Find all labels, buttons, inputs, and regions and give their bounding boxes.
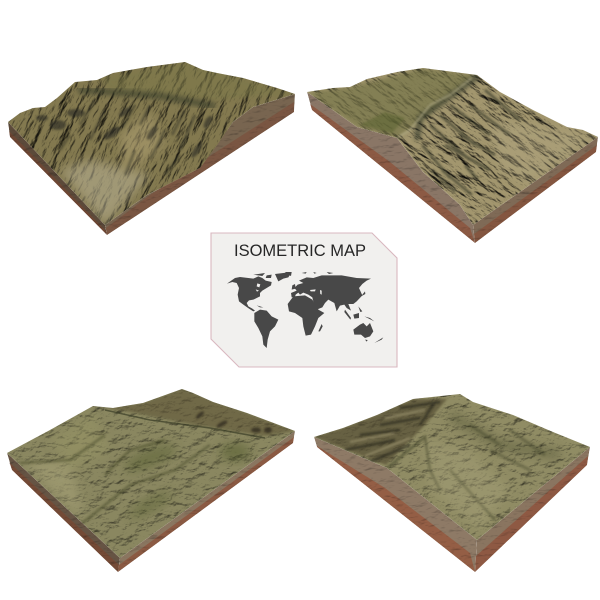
north america	[227, 276, 272, 311]
side faces	[314, 437, 590, 572]
card background	[211, 233, 397, 367]
side faces	[8, 94, 295, 235]
terrain surface	[314, 394, 590, 540]
americas	[227, 272, 292, 348]
terrain block: top right	[307, 68, 598, 243]
caribbean	[257, 305, 263, 307]
inland seas	[310, 289, 322, 295]
side faces	[307, 92, 598, 243]
terrain block: top left	[8, 62, 295, 235]
greenland and arctic islands	[253, 272, 292, 281]
africa	[288, 295, 324, 336]
title: ISOMETRIC MAP	[234, 241, 366, 260]
south america	[254, 310, 278, 348]
world map	[227, 272, 383, 348]
islands	[285, 272, 383, 343]
old world	[285, 272, 383, 343]
terrain surface	[7, 389, 295, 558]
terrain surface	[307, 68, 598, 225]
side faces	[7, 431, 295, 572]
terrain surface	[8, 62, 295, 225]
terrain block: bottom left	[7, 389, 295, 572]
terrain block: bottom right	[314, 394, 590, 572]
australia	[353, 323, 373, 338]
hudson bay and great lakes	[256, 283, 260, 292]
eurasia	[291, 275, 371, 311]
panel: map card	[211, 233, 397, 367]
